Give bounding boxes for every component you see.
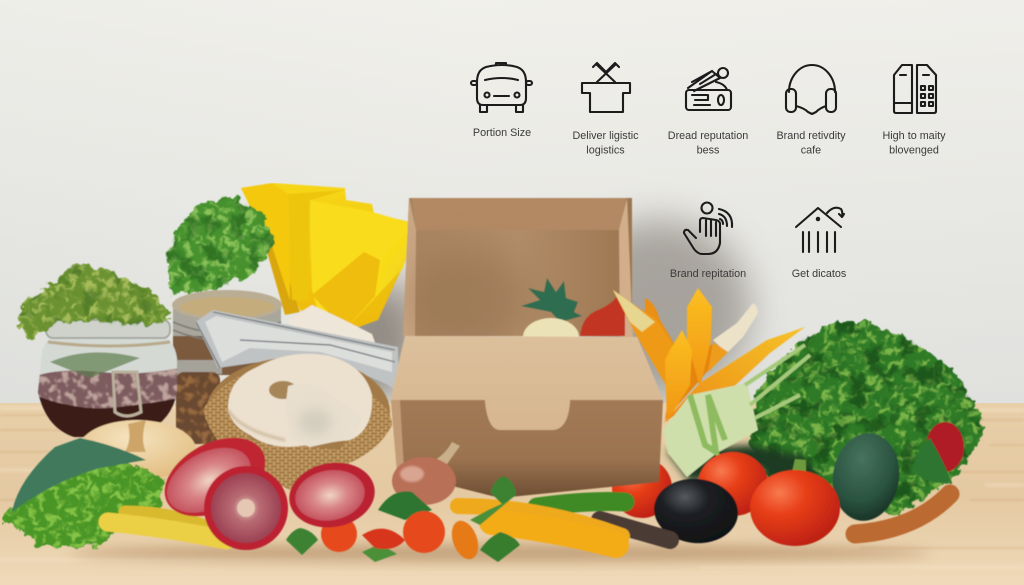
box interior (403, 198, 633, 350)
label: Dread reputation bess: bess (697, 144, 720, 156)
red tomato behind greens (926, 422, 964, 472)
halved red fruit 3 (284, 456, 380, 534)
lettuce and dark leaf (2, 438, 165, 548)
icon: hand with signal (684, 202, 732, 254)
label: Deliver ligistic logistics: Deliver ligistic (572, 130, 639, 142)
yellow bananas (108, 512, 226, 540)
dark courgette (600, 520, 670, 540)
eggplant (651, 475, 741, 547)
background: wooden table (0, 403, 1024, 585)
tall tin jar (172, 290, 282, 444)
red onion in box (580, 296, 625, 336)
icon: card wallet (686, 68, 731, 110)
right greens bundle (750, 322, 987, 513)
orange and yellow vegetables (613, 288, 805, 423)
yellow-orange squash pair (458, 506, 622, 545)
label: Deliver ligistic logistics: logistics (586, 144, 625, 156)
onion (392, 442, 460, 505)
label: Brand retivdity cafe (776, 130, 846, 156)
sweet potato (855, 494, 950, 534)
wicker basket (203, 357, 392, 490)
label: High to maity blovenged: blovenged (889, 144, 939, 156)
green leaf front of tomato (912, 438, 950, 484)
pale cabbage stalks (663, 345, 810, 477)
large tomato (750, 459, 840, 546)
icon: twin panels (894, 65, 936, 113)
background: wall (0, 0, 1024, 410)
plastic pouch (195, 310, 399, 392)
icon: house with columns (796, 208, 844, 252)
dark green squash (827, 429, 905, 525)
white cloth (288, 305, 376, 345)
green pepper (537, 502, 625, 507)
glass jar with beans (36, 320, 181, 440)
icon: gift basket (582, 63, 630, 112)
icon: car (471, 63, 532, 112)
halved red fruit 1 (151, 422, 279, 532)
label: Portion Size: Portion Size (473, 127, 531, 139)
label: Dread reputation bess: Dread reputation (668, 130, 748, 142)
moss in jar (17, 264, 172, 340)
bread (228, 354, 372, 447)
label: Brand retivdity cafe: Brand retivdity (776, 130, 846, 142)
label: High to maity blovenged: High to maity (882, 130, 946, 142)
label: Get dicatos: Get dicatos (792, 268, 847, 280)
yellow bag (241, 183, 415, 332)
icon: headphones (786, 65, 836, 114)
label: Brand retivdity cafe: cafe (801, 144, 821, 156)
photo scene: food and box (2, 183, 987, 563)
halved red fruit 2 (204, 466, 288, 550)
tomato rear (698, 452, 768, 516)
label: Dread reputation bess (668, 130, 748, 156)
dark shadow under stalks (666, 445, 830, 490)
icon row and labels (471, 63, 946, 280)
parsley (166, 196, 276, 294)
label: Deliver ligistic logistics (572, 130, 639, 156)
label: High to maity blovenged (882, 130, 946, 156)
pumpkin (78, 420, 196, 480)
label: Brand repitation: Brand repitation (670, 268, 746, 280)
tomato left (612, 458, 672, 518)
pineapple in box (521, 278, 582, 337)
box lid and front (391, 336, 663, 498)
herbs and small vegetables (286, 476, 520, 563)
